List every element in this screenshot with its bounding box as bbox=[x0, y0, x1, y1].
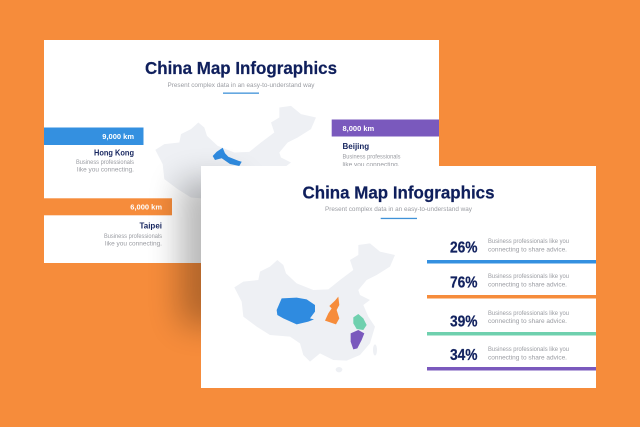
34% value: 34% bbox=[450, 347, 478, 364]
back slide title underline bbox=[223, 92, 259, 94]
Hong Kong text: Business professionals bbox=[76, 159, 134, 166]
back map highlighted province bbox=[213, 148, 242, 166]
front map of China bbox=[234, 243, 395, 372]
76% value: 76% bbox=[450, 274, 478, 292]
front slide shadow bbox=[180, 180, 240, 325]
stat row: 76% bbox=[427, 273, 596, 298]
34% text: Business professionals like you bbox=[488, 346, 570, 353]
26% bar bbox=[427, 260, 596, 264]
Hainan bbox=[336, 367, 342, 372]
stat row: 26% bbox=[427, 238, 596, 264]
card: Beijing: like you connecting. bbox=[342, 161, 400, 168]
stat row: 39% bbox=[427, 310, 596, 336]
39% text: Business professionals like you bbox=[488, 310, 570, 317]
mainland bbox=[234, 243, 395, 362]
card: Hong Kong: like you connecting. bbox=[77, 167, 134, 174]
Beijing distance bar bbox=[332, 120, 439, 136]
stat row: 39%: connecting to share advice. bbox=[488, 318, 567, 325]
back slide title: China Map Infographics bbox=[145, 58, 337, 78]
Taiwan bbox=[373, 344, 377, 356]
card: Beijing bbox=[332, 120, 439, 168]
39% value: 39% bbox=[450, 314, 478, 330]
76% bar bbox=[427, 295, 596, 298]
Taipei distance: 6,000 km bbox=[130, 203, 162, 212]
province: green bbox=[353, 314, 367, 330]
stat row: 34%: connecting to share advice. bbox=[488, 354, 567, 362]
province: orange bbox=[325, 297, 339, 324]
back map of China bbox=[155, 106, 316, 224]
card: Hong Kong bbox=[44, 128, 144, 174]
Hong Kong distance: 9,000 km bbox=[102, 132, 134, 141]
stat row: 34% bbox=[427, 346, 596, 370]
Beijing distance: 8,000 km bbox=[342, 124, 375, 133]
Taipei name: Taipei bbox=[139, 222, 162, 230]
34% bar bbox=[427, 367, 596, 370]
76% text: Business professionals like you bbox=[488, 273, 570, 280]
39% bar bbox=[427, 332, 596, 336]
Taipei text: Business professionals bbox=[104, 233, 162, 240]
Beijing name: Beijing bbox=[342, 142, 369, 151]
card: Taipei bbox=[44, 198, 172, 248]
card: Taipei: like you connecting. bbox=[105, 241, 162, 248]
back slide subtitle: Present complex data in an easy-to-understand way bbox=[168, 83, 314, 89]
26% text: Business professionals like you bbox=[488, 238, 570, 245]
Beijing text: Business professionals bbox=[342, 154, 400, 160]
front slide subtitle: Present complex data in an easy-to-understand way bbox=[325, 207, 472, 213]
front slide title underline bbox=[381, 218, 417, 219]
province: blue bbox=[277, 298, 315, 324]
province: purple bbox=[351, 330, 364, 349]
front slide title: China Map Infographics bbox=[302, 183, 495, 203]
Hong Kong distance bar bbox=[44, 128, 144, 145]
panel: back slide bbox=[44, 40, 439, 263]
panel: front slide bbox=[201, 166, 596, 388]
Hong Kong name: Hong Kong bbox=[94, 148, 134, 158]
Taipei distance bar bbox=[44, 198, 172, 215]
stat row: 76%: connecting to share advice. bbox=[488, 281, 567, 288]
stat row: 26%: connecting to share advice. bbox=[488, 246, 567, 254]
26% value: 26% bbox=[450, 240, 478, 256]
